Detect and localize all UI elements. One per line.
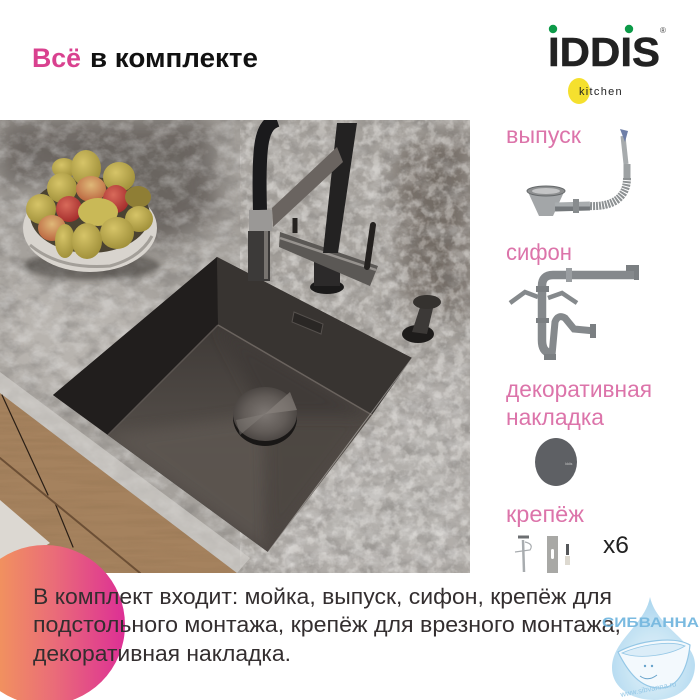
clamp — [515, 537, 531, 572]
soap dispenser — [402, 295, 441, 343]
watermark: Сибванна: СИБВАННА — [602, 614, 699, 630]
logo: IDDIS kitchen — [548, 25, 666, 104]
cover disc: Iddis — [565, 462, 573, 466]
watermark: Сибванна: www.sibvanna.ru — [619, 679, 677, 699]
body text — [33, 584, 621, 666]
item: декоративная накладка: накладка — [506, 404, 604, 430]
cabinet seams — [0, 395, 140, 573]
body text: подстольного монтажа, крепёж для врезного монтажа, — [33, 612, 621, 637]
body text: В комплект входит: мойка, выпуск, сифон, крепёж для — [33, 584, 612, 609]
body text: декоративная накладка. — [33, 641, 291, 666]
logo: IDDIS kitchen: ® — [660, 26, 666, 35]
logo: IDDIS kitchen: IDDIS — [548, 29, 660, 75]
light stone lower left — [0, 281, 154, 395]
floor — [0, 500, 50, 559]
item: сифон — [506, 239, 639, 360]
water drop — [612, 597, 695, 700]
item: выпуск — [506, 122, 628, 216]
light stone lower right — [267, 363, 468, 571]
x6: х6 — [603, 532, 629, 559]
title: Всё — [32, 43, 81, 73]
faucet — [248, 120, 378, 294]
cover disc — [535, 438, 577, 486]
item: крепёж: крепёж — [506, 501, 585, 527]
overflow plate — [292, 312, 323, 334]
siphon drawing — [510, 265, 639, 360]
cabinet wood front — [0, 393, 237, 573]
gradient circle — [0, 545, 125, 700]
fruit bowl with pears — [23, 150, 160, 280]
worktop stone base — [0, 120, 470, 573]
item: декоративная накладка: декоративная — [506, 376, 652, 402]
title: в комплекте — [90, 43, 258, 73]
outlet drawing — [527, 129, 628, 216]
photo: kitchen sink on stone worktop — [0, 120, 470, 573]
drain cover — [233, 387, 297, 446]
dark stone band right — [395, 130, 470, 320]
item: сифон: сифон — [506, 239, 572, 265]
plate — [547, 536, 558, 573]
watermark: Сибванна — [602, 597, 699, 700]
worktop light edge — [0, 372, 250, 573]
sink — [53, 257, 412, 552]
item: крепёж — [506, 501, 629, 573]
item: выпуск: выпуск — [506, 122, 582, 148]
bathtub — [618, 640, 690, 688]
dark upper left stone — [0, 120, 220, 250]
item: декоративная накладка — [506, 376, 652, 486]
screw — [565, 544, 570, 565]
logo: IDDIS kitchen: kitchen — [579, 86, 623, 98]
